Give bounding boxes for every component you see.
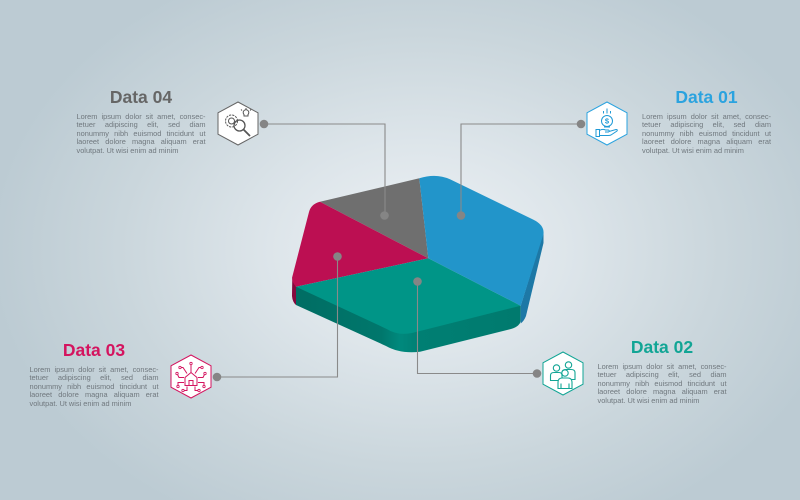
text block: Data 03: volutpat. Ut wisi enim ad minim (30, 398, 131, 408)
text block: Data 02: volutpat. Ut wisi enim ad minim (598, 396, 699, 404)
text block: Data 03: nonummy nibh euismod tincidunt ut (30, 382, 158, 390)
text block: Data 02: nonummy nibh euismod tincidunt ut (598, 378, 726, 388)
chart side: red (292, 277, 296, 305)
text block: Data 02 (598, 362, 726, 404)
text block: Data 02: laoreet dolore magna aliquam erat (598, 387, 726, 396)
panel: Data 02 (598, 336, 726, 404)
leader line: Data 03 (213, 252, 342, 381)
hexagonal 3D chart (292, 176, 544, 352)
text block: Data 03: Lorem ipsum dolor sit amet, consec- (30, 364, 158, 374)
leader line: Data 01 (457, 120, 585, 220)
panel: Data 03 (30, 340, 158, 408)
chart slice: gray (320, 178, 428, 258)
text block: Data 01: laoreet dolore magna aliquam erat (642, 137, 771, 146)
heading: Data 02: Data 02 (631, 336, 693, 356)
icon: group of people (543, 352, 583, 395)
text block: Data 03 (30, 364, 158, 408)
icon: coin in hand (587, 102, 627, 145)
text block: Data 04: nonummy nibh euismod tincidunt ut (76, 128, 206, 138)
leader line: Data 02 (413, 277, 541, 378)
chart slice: crimson (292, 202, 428, 287)
chart side: blue (521, 232, 544, 324)
text block: Data 03: tetuer adipiscing elit, sed diam (30, 373, 158, 382)
text block: Data 01: Lorem ipsum dolor sit amet, consec- (642, 112, 771, 120)
text block: Data 01: nonummy nibh euismod tincidunt ut (642, 128, 771, 138)
text block: Data 02: Lorem ipsum dolor sit amet, consec- (598, 362, 726, 370)
heading: Data 03: Data 03 (63, 340, 125, 360)
icon: house circuit (171, 355, 211, 398)
chart slice: blue (419, 176, 544, 306)
text block: Data 04: volutpat. Ut wisi enim ad minim (76, 146, 178, 154)
icon: gears and magnifier (218, 102, 258, 145)
text block: Data 04: Lorem ipsum dolor sit amet, consec- (76, 112, 206, 120)
icon: coin in hand: $ (605, 116, 610, 126)
chart slice: teal (296, 258, 521, 334)
panel: Data 04 (76, 86, 206, 154)
leader line: Data 04 (260, 120, 389, 220)
text block: Data 04 (76, 112, 206, 154)
text block: Data 03: laoreet dolore magna aliquam erat (30, 390, 158, 399)
text block: Data 02: tetuer adipiscing elit, sed diam (598, 370, 726, 379)
heading: Data 04: Data 04 (110, 86, 172, 106)
text block: Data 04: tetuer adipiscing elit, sed diam (76, 120, 206, 129)
heading: Data 01: Data 01 (675, 86, 738, 106)
text block: Data 01 (642, 112, 771, 154)
panel: Data 01 (642, 86, 771, 154)
text block: Data 04: laoreet dolore magna aliquam erat (76, 137, 206, 146)
chart side: teal (296, 287, 521, 352)
text block: Data 01: tetuer adipiscing elit, sed diam (642, 120, 771, 129)
text block: Data 01: volutpat. Ut wisi enim ad minim (642, 146, 744, 154)
